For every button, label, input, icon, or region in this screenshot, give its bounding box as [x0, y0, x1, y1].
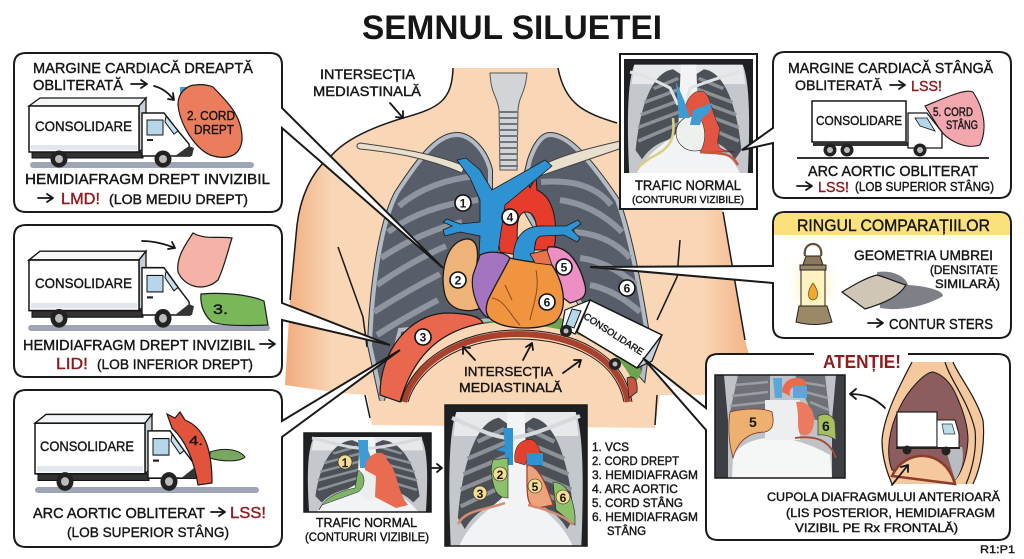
caption: ARC AORTIC OBLITERAT: [33, 506, 205, 522]
marker 3: [415, 329, 431, 345]
label: upper mediastinal intersection: INTERSECȚIA: [320, 67, 415, 82]
label: upper mediastinal intersection: [313, 67, 421, 118]
title gap: [814, 350, 908, 359]
large annotated x-ray: 5: [532, 480, 539, 494]
frontal x-ray: 5: [749, 414, 757, 430]
large annotated x-ray: 3: [477, 487, 484, 501]
ribs: [374, 176, 645, 340]
frontal x-ray: [715, 375, 845, 478]
arrow between x-rays: [432, 464, 442, 472]
marker 1: [455, 195, 471, 211]
panel: aortic arch: [14, 350, 400, 547]
heart: DREPT: [194, 123, 234, 137]
large annotated x-ray: [445, 405, 587, 546]
marker 6 on heart: [539, 294, 555, 310]
arrow to dome: [892, 465, 908, 485]
yellow header: [774, 213, 1010, 235]
truck label: CONSOLIDARE: [816, 114, 902, 128]
torso and arms: [285, 68, 760, 428]
aorta: 4.: [189, 433, 203, 448]
central anatomy illustration: [285, 68, 760, 428]
frontal x-ray: 6: [822, 418, 830, 434]
right lung: [520, 135, 648, 377]
truck label: CONSOLIDARE: [35, 118, 132, 134]
caption: HEMIDIAFRAGM DREPT INVIZIBIL: [25, 172, 270, 188]
ground shadow: [30, 162, 254, 168]
truck on diaphragm: CONSOLIDARE: [581, 311, 645, 358]
small x-ray caption: (CONTURURI VIZIBILE): [305, 530, 429, 544]
marker 1: 1: [460, 196, 467, 210]
panel: right cardiac border: MARGINE CARDIACĂ DREAPTĂ: [33, 60, 253, 77]
label: lower mediastinal intersection: INTERSECȚIA: [464, 364, 553, 379]
marker 6 on lung: [619, 280, 635, 296]
panel: left cardiac border: [742, 52, 1011, 198]
caption: HEMIDIAFRAGM DREPT INVIZIBIL: [23, 338, 255, 354]
superior vena cava: [443, 158, 552, 255]
panel: right lower lobe: LID!: [56, 356, 88, 373]
truck: [812, 101, 942, 156]
large annotated x-ray: 2: [497, 468, 504, 482]
stomach fragment: [627, 377, 637, 398]
pulmonary artery: [513, 220, 581, 264]
panel: comparison ring: [590, 212, 1011, 338]
road: [797, 157, 989, 159]
panel: normal traffic x-ray top: [620, 54, 757, 209]
panel: left cardiac border: MARGINE CARDIACĂ STÂNGĂ: [788, 60, 993, 77]
small x-ray caption: [305, 515, 429, 544]
panel: left cardiac border: OBLITERATĂ: [795, 77, 883, 93]
truck label: CONSOLIDARE: [40, 438, 134, 454]
left lung: [370, 135, 490, 400]
body contour lines: [290, 68, 745, 425]
legend: 4. ARC AORTIC: [592, 482, 678, 496]
liver / right hemidiaphragm: [380, 313, 483, 402]
panel: left cardiac border: LSS!: [818, 179, 849, 196]
right atrium purple: [472, 252, 510, 318]
pink left heart border: 5. CORD: [933, 107, 973, 119]
panel: attention: ATENȚIE!: [823, 352, 901, 372]
trachea: [490, 73, 527, 170]
aorta: [167, 412, 212, 485]
panel: right lower lobe: [14, 225, 390, 377]
panel: comparison ring: (DENSITATE: [930, 265, 998, 277]
arrow to x-ray: [850, 389, 885, 408]
marker 2: [450, 272, 466, 288]
legend: STÂNG: [607, 523, 646, 538]
small normal x-ray: [304, 433, 431, 512]
heart: 2. CORD: [187, 109, 235, 123]
small x-ray caption: TRAFIC NORMAL: [316, 515, 417, 530]
green diaphragm: 3.: [213, 301, 228, 317]
panel: left cardiac border: LSS!: [911, 78, 942, 95]
green diaphragm: [201, 293, 268, 326]
pink left heart border: STÂNG: [946, 119, 978, 132]
legend: 5. CORD STÂNG: [592, 495, 683, 510]
left cardiac border: [540, 247, 586, 303]
marker 4: 4: [507, 210, 514, 224]
icon: pillow with shadow: [842, 272, 943, 309]
legend: 1. VCS: [592, 440, 629, 454]
ground shadow: [28, 325, 270, 331]
panel: comparison ring: RINGUL COMPARAȚIILOR: [797, 217, 990, 235]
marker 5: 5: [561, 260, 568, 274]
panel: aortic arch: (LOB SUPERIOR STÂNG): [67, 524, 229, 540]
green leaf: [210, 449, 245, 461]
x-ray overlays: [630, 72, 740, 105]
panel: attention: (LIS POSTERIOR, HEMIDIAFRAGM: [786, 508, 995, 520]
marker 6 on lung: 6: [624, 282, 631, 296]
truck: [35, 414, 200, 491]
aortic arch: [498, 177, 556, 255]
panel: attention: [643, 350, 1010, 540]
caption: ARC AORTIC OBLITERAT: [808, 164, 978, 180]
truck: [29, 251, 194, 328]
panel: right cardiac border: (LOB MEDIU DREPT): [109, 192, 248, 207]
sagittal view: [882, 362, 984, 484]
marker 4: [502, 209, 518, 225]
small normal x-ray: 1: [342, 456, 349, 470]
panel: comparison ring: SIMILARĂ): [935, 278, 1000, 291]
title: SEMNUL SILUETEI: [362, 9, 662, 47]
panel: right lower lobe: (LOB INFERIOR DREPT): [97, 357, 253, 372]
panel: left cardiac border: (LOB SUPERIOR STÂNG): [855, 179, 994, 194]
label: lower mediastinal intersection: MEDIASTINALĂ: [459, 380, 562, 395]
marker 6 on heart: 6: [544, 296, 551, 310]
ground shadow: [35, 487, 259, 493]
legend: 3. HEMIDIAFRAGM: [592, 468, 698, 482]
heart: [178, 85, 242, 157]
marker 5: [556, 259, 572, 275]
large annotated x-ray: 6: [560, 491, 567, 505]
panel: comparison ring: CONTUR STERS: [889, 317, 993, 333]
ventricle: [486, 258, 563, 328]
panel: right cardiac border: OBLITERATĂ: [33, 77, 123, 94]
left diaphragm green area: [483, 315, 642, 385]
truck label: CONSOLIDARE: [35, 275, 132, 291]
comparison text: GEOMETRIA UMBREI: [854, 247, 993, 263]
icon: lantern: [783, 244, 843, 325]
arrows to heart: [131, 80, 174, 100]
pink left heart border: [925, 91, 984, 146]
label: upper mediastinal intersection: MEDIASTINALĂ: [313, 84, 421, 99]
panel: aortic arch: LSS!: [230, 505, 266, 522]
truck on diaphragm: [560, 300, 662, 370]
right atrium outer: [443, 239, 481, 311]
footer code: R1:P1: [980, 544, 1015, 556]
label: lower mediastinal intersection: [459, 343, 581, 395]
legend: 2. CORD DREPT: [592, 454, 680, 468]
caption: CUPOLA DIAFRAGMULUI ANTERIOARĂ: [767, 491, 1000, 504]
legend: [592, 440, 698, 538]
panel: normal traffic x-ray top: (CONTURURI VIZIBILE): [632, 194, 744, 206]
legend: 6. HEMIDIAFRAGM: [592, 510, 698, 524]
diaphragm dome band: [404, 334, 628, 402]
panel: right cardiac border: LMD!: [61, 191, 100, 208]
clavicles: [357, 141, 622, 176]
pink lobe: [178, 233, 232, 287]
truck: [29, 98, 194, 168]
marker 3: 3: [420, 330, 427, 344]
panel: right cardiac border: [14, 53, 443, 268]
marker 2: 2: [455, 274, 462, 288]
panel: normal traffic x-ray top: TRAFIC NORMAL: [635, 178, 741, 193]
arrow: [142, 241, 175, 249]
panel: attention: VIZIBIL PE Rx FRONTALĂ): [795, 522, 958, 535]
